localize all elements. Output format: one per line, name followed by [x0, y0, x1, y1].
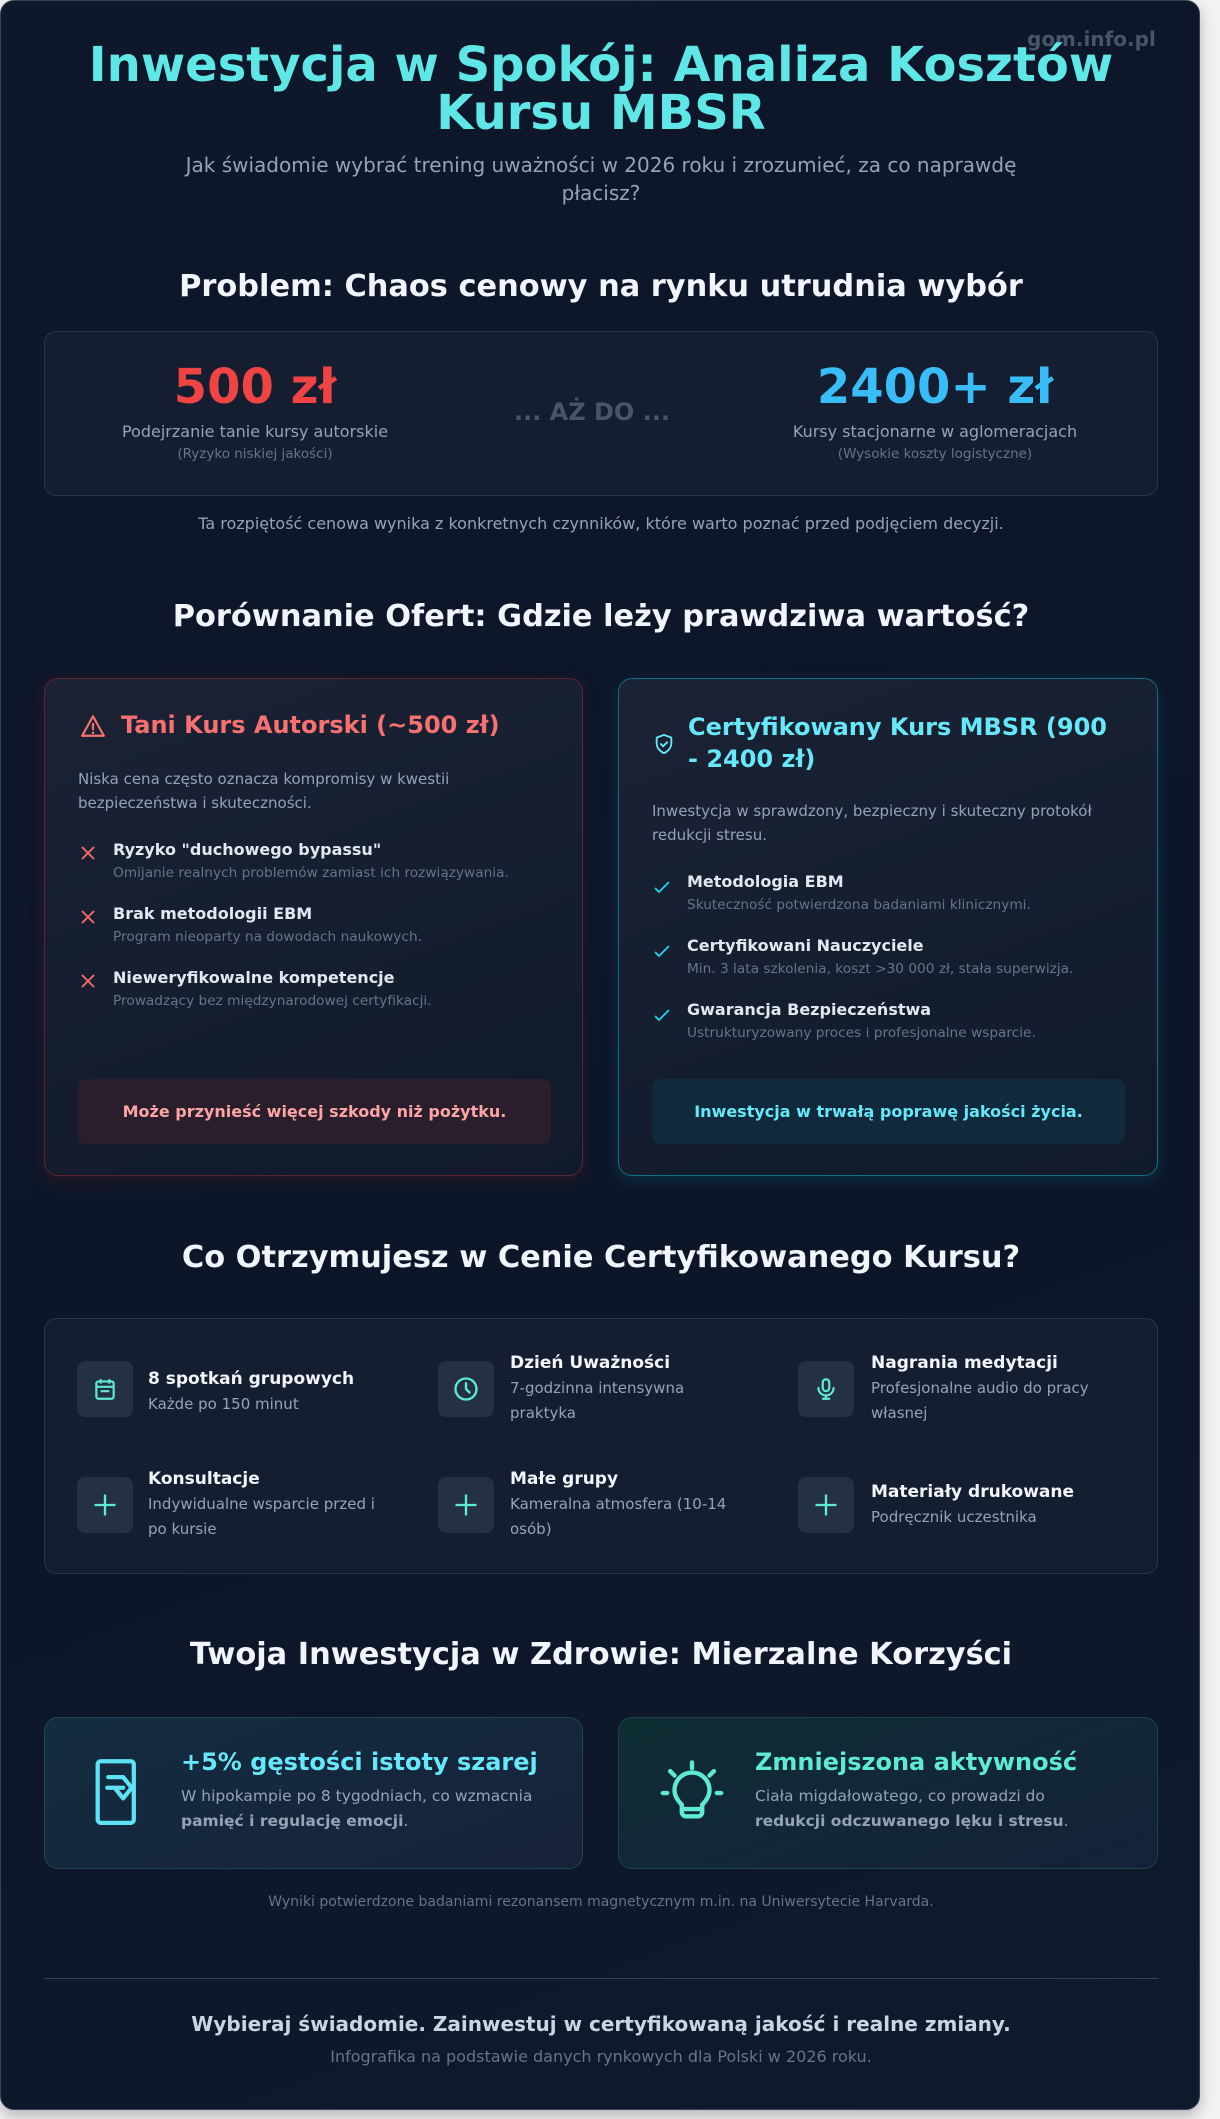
card heading: Tani Kurs Autorski (~500 zł): [121, 711, 500, 739]
feature: consultations: Konsultacje: [148, 1469, 260, 1489]
footer: source: Infografika na podstawie danych rynkowych dla Polski w 2026 roku.: [330, 2047, 872, 2066]
heading: benefits: Twoja Inwestycja w Zdrowie: Mierzalne Korzyści: [190, 1637, 1012, 1672]
feature: small groups: Kameralna atmosfera (10-14 osób): [510, 1495, 726, 1538]
panel: price range: [44, 331, 1158, 496]
item: Brak metodologii EBM: [113, 904, 312, 923]
separator text: ... AŻ DO ...: [514, 398, 670, 426]
panel: features: [44, 1318, 1158, 1574]
feature: printed materials: [798, 1477, 1074, 1533]
footer: call to action: Wybieraj świadomie. Zainwestuj w certyfikowaną jakość i realne zmiany.: [191, 2012, 1011, 2036]
benefit text: Ciała migdałowatego, co prowadzi do redukcji odczuwanego lęku i stresu.: [755, 1787, 1069, 1830]
feature: meetings: 8 spotkań grupowych: [148, 1369, 354, 1389]
icon: light bulb: [660, 1760, 724, 1818]
feature: recordings: Profesjonalne audio do pracy własnej: [871, 1379, 1089, 1422]
note: price range: Ta rozpiętość cenowa wynika z konkretnych czynników, które warto poznać przed podjęciem decyzji.: [198, 514, 1004, 533]
feature: recordings: Nagrania medytacji: [871, 1353, 1058, 1373]
price low: Podejrzanie tanie kursy autorskie: [122, 422, 388, 441]
feature: small groups: Małe grupy: [510, 1469, 618, 1489]
item: Ryzyko "duchowego bypassu": [113, 840, 381, 859]
feature: printed materials: Podręcznik uczestnika: [871, 1508, 1037, 1526]
item: Certyfikowani Nauczyciele: [687, 936, 924, 955]
item: Skuteczność potwierdzona badaniami klinicznymi.: [687, 897, 1031, 913]
feature: mindfulness day: Dzień Uważności: [510, 1353, 670, 1373]
icon: warning: [81, 715, 105, 737]
heading: what you get: Co Otrzymujesz w Cenie Certyfikowanego Kursu?: [182, 1240, 1020, 1275]
card heading: Certyfikowany Kurs MBSR (900 - 2400 zł): [688, 713, 1107, 773]
icon: shield: [656, 734, 672, 754]
item: Program nieoparty na dowodach naukowych.: [113, 929, 422, 945]
heading: problem: Problem: Chaos cenowy na rynku utrudnia wybór: [179, 269, 1023, 304]
feature: meetings: Każde po 150 minut: [148, 1395, 299, 1413]
item: [81, 904, 422, 945]
item: Ustrukturyzowany proces i profesjonalne wsparcie.: [687, 1025, 1036, 1041]
card description: Niska cena często oznacza kompromisy w kwestii bezpieczeństwa i skuteczności.: [78, 770, 449, 812]
price high: 2400+ zł: [817, 359, 1053, 415]
callout: warning: [78, 1079, 551, 1144]
panel: cheap course: [44, 678, 583, 1176]
item: Gwarancja Bezpieczeństwa: [687, 1000, 931, 1019]
item: Omijanie realnych problemów zamiast ich rozwiązywania.: [113, 865, 509, 881]
price low: (Ryzyko niskiej jakości): [177, 446, 333, 462]
list: risks: [81, 840, 509, 1009]
title: Inwestycja w Spokój: Analiza Kosztów: [89, 37, 1113, 93]
benefit text: +5% gęstości istoty szarej: [181, 1748, 538, 1776]
title: Kursu MBSR: [436, 85, 766, 141]
item: Min. 3 lata szkolenia, koszt >30 000 zł, stała superwizja.: [687, 961, 1073, 977]
icon: brain/tablet: [96, 1759, 136, 1825]
callout: warning: Może przynieść więcej szkody niż pożytku.: [123, 1102, 506, 1121]
callout: investment: Inwestycja w trwałą poprawę jakości życia.: [694, 1102, 1083, 1121]
subtitle: Jak świadomie wybrać trening uważności w 2026 roku i zrozumieć, za co naprawdę płacisz?: [186, 153, 1016, 205]
feature: printed materials: Materiały drukowane: [871, 1482, 1074, 1502]
benefit text: Zmniejszona aktywność: [755, 1748, 1077, 1776]
panel: certified course: [618, 678, 1158, 1176]
item: [81, 840, 509, 881]
note: research: Wyniki potwierdzone badaniami rezonansem magnetycznym m.in. na Uniwersytecie Harvarda.: [268, 1894, 934, 1910]
panel: grey matter: [44, 1717, 583, 1869]
price high: (Wysokie koszty logistyczne): [838, 446, 1032, 462]
price low: 500 zł: [174, 359, 336, 415]
panel: amygdala: [618, 1717, 1158, 1869]
feature: mindfulness day: 7-godzinna intensywna praktyka: [510, 1379, 684, 1422]
feature: consultations: Indywidualne wsparcie przed i po kursie: [148, 1495, 375, 1538]
item: [654, 936, 1073, 977]
price high: [793, 359, 1077, 462]
watermark: gom.info.pl: [1027, 27, 1156, 51]
benefit text: [181, 1748, 538, 1830]
item: Metodologia EBM: [687, 872, 844, 891]
benefit text: W hipokampie po 8 tygodniach, co wzmacnia pamięć i regulację emocji.: [181, 1787, 532, 1830]
callout: investment: [652, 1079, 1125, 1144]
feature: mindfulness day: [438, 1353, 684, 1422]
feature: meetings: [77, 1361, 354, 1417]
item: Prowadzący bez międzynarodowej certyfikacji.: [113, 993, 432, 1009]
feature: small groups: [438, 1469, 726, 1538]
title: [89, 37, 1113, 141]
item: [654, 1000, 1036, 1041]
price high: Kursy stacjonarne w aglomeracjach: [793, 422, 1077, 441]
benefit text: [755, 1748, 1077, 1830]
heading: comparison: Porównanie Ofert: Gdzie leży prawdziwa wartość?: [173, 599, 1029, 634]
feature: consultations: [77, 1469, 375, 1538]
item: [654, 872, 1031, 913]
list: benefits: [654, 872, 1073, 1041]
item: Nieweryfikowalne kompetencje: [113, 968, 395, 987]
item: [81, 968, 432, 1009]
price low: [122, 359, 388, 462]
feature: recordings: [798, 1353, 1089, 1422]
card description: Inwestycja w sprawdzony, bezpieczny i skuteczny protokół redukcji stresu.: [652, 802, 1092, 844]
